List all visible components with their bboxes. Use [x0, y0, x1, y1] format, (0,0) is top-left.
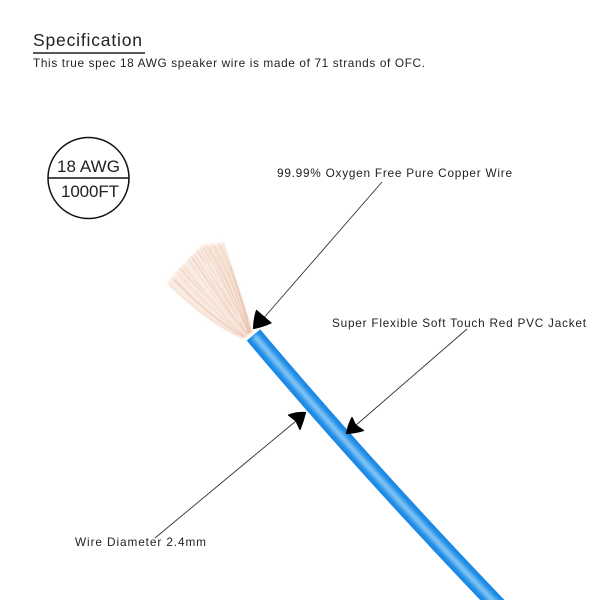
label: wire diameter: Wire Diameter 2.4mm	[75, 535, 206, 549]
arrow: PVC jacket	[346, 329, 467, 434]
subtitle text: This true spec 18 AWG speaker wire is made of 71 strands of OFC.	[33, 56, 425, 70]
label: PVC jacket: Super Flexible Soft Touch Red PVC Jacket	[332, 316, 587, 330]
copper strands	[168, 243, 253, 338]
arrow: wire diameter	[155, 412, 306, 538]
badge: 18 AWG 1000FT: 1000FT	[61, 182, 119, 201]
arrow: copper wire	[254, 182, 382, 328]
heading: Specification: Specification	[33, 30, 142, 50]
blue wire	[254, 335, 500, 600]
badge: 18 AWG 1000FT: 18 AWG	[57, 157, 120, 176]
badge: 18 AWG 1000FT	[48, 138, 129, 218]
label: copper wire: 99.99% Oxygen Free Pure Copper Wire	[277, 166, 512, 180]
